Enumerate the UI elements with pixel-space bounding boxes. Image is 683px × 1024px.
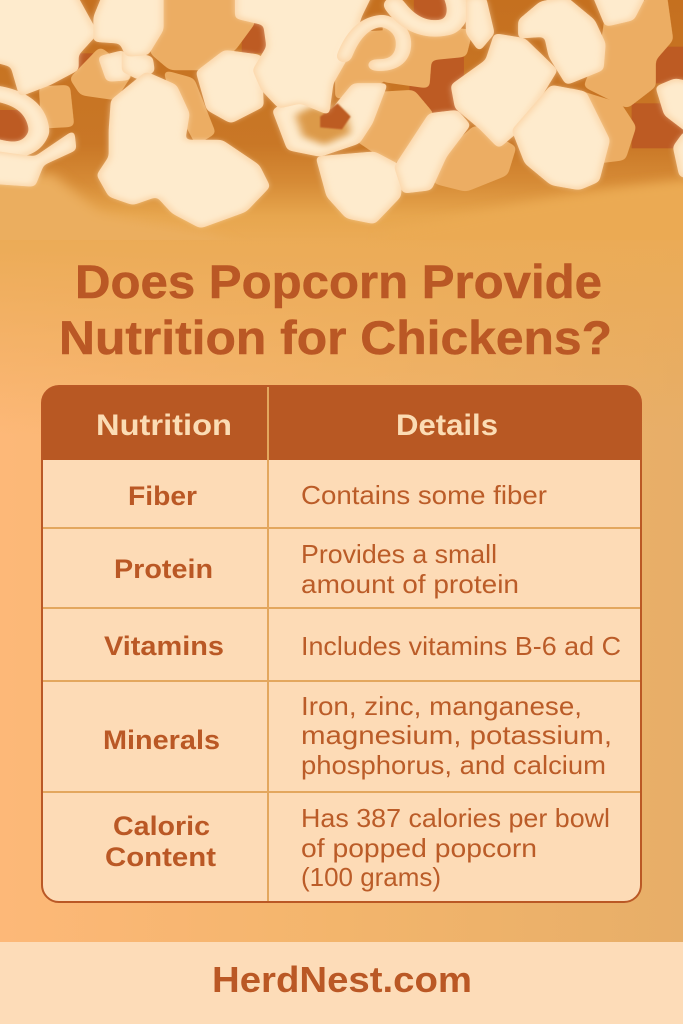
table outline (42, 386, 641, 902)
center-right kernel (394, 110, 470, 193)
row: protein (114, 539, 519, 599)
lower center kernel (316, 152, 403, 224)
header row: Details (396, 409, 498, 442)
title (59, 255, 612, 364)
row: minerals: Minerals (103, 725, 220, 755)
cup hollow (295, 103, 351, 145)
row: vitamins: Vitamins (104, 631, 224, 661)
row: caloric content: Has 387 calories per bowl (301, 803, 610, 833)
row: caloric content: (100 grams) (301, 862, 441, 892)
row: minerals (103, 691, 612, 780)
header row: Nutrition (96, 409, 232, 442)
header row (96, 409, 498, 442)
row: fiber: Contains some fiber (301, 480, 547, 510)
curled strand (344, 21, 404, 65)
row: vitamins: Includes vitamins B-6 ad C (301, 631, 621, 661)
large front-left kernel (97, 72, 270, 228)
row: protein: amount of protein (301, 569, 519, 599)
row: minerals: phosphorus, and calcium (301, 750, 606, 780)
row: fiber (128, 480, 547, 511)
row: caloric content: Content (105, 842, 216, 872)
top left kernel (0, 0, 98, 97)
footer band (0, 942, 683, 1024)
top arc kernel (394, 0, 458, 28)
row: caloric content (105, 803, 610, 892)
row: caloric content: Caloric (113, 811, 210, 841)
row: vitamins (104, 631, 621, 661)
title: Does Popcorn Provide (75, 255, 602, 308)
table surface with shadow (0, 0, 683, 267)
small knobs (98, 50, 131, 82)
row: fiber: Fiber (128, 481, 198, 511)
center main kernel (235, 0, 375, 115)
center-left small kernel (196, 50, 264, 123)
dark gaps between kernels (0, 0, 683, 148)
cup dark center (320, 103, 351, 129)
table body (42, 386, 641, 902)
row: protein: Provides a small (301, 539, 497, 569)
popcorn photo (0, 0, 683, 267)
nutrition table (42, 386, 641, 902)
title: Nutrition for Chickens? (59, 311, 612, 364)
left ring kernel (0, 93, 39, 150)
cup kernel (272, 83, 388, 157)
row: minerals: magnesium, potassium, (301, 720, 612, 750)
popcorn kernels (0, 0, 683, 228)
row: minerals: Iron, zinc, manganese, (301, 691, 582, 721)
footer band: HerdNest.com (212, 959, 472, 1000)
right lobed kernel (518, 0, 605, 85)
mid-tone kernels (39, 0, 673, 192)
row: protein: Protein (114, 554, 213, 584)
row: caloric content: of popped popcorn (301, 833, 537, 863)
